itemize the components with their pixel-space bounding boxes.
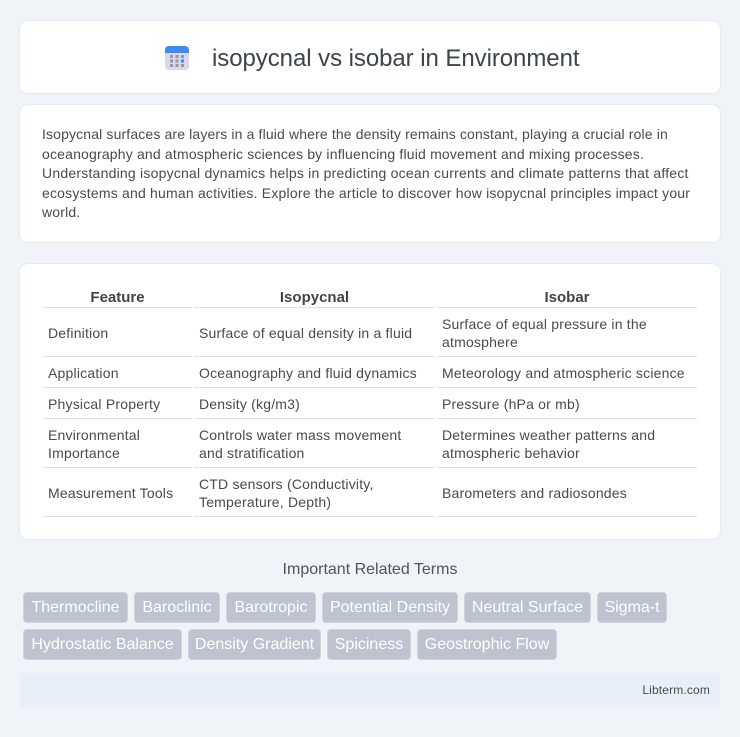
row: Physical Property [48,396,580,412]
row: Environmental Importance: and stratification [199,445,305,461]
row: Measurement Tools: Temperature, Depth) [199,494,331,510]
row: Definition [48,316,647,350]
row: Definition: Surface of equal pressure in the [442,316,647,332]
intro paragraph: Understanding isopycnal dynamics helps in predicting ocean currents and climate patterns that affect [42,165,689,181]
row: Environmental Importance [48,427,655,461]
related term tags: Barotropic [235,599,307,616]
row: Environmental Importance: Controls water mass movement [199,427,401,443]
panel: intro text [20,105,720,242]
row: Physical Property: Physical Property [48,396,160,412]
footer bar [20,673,720,707]
intro paragraph: oceanography and atmospheric sciences by influencing fluid movement and mixing processes. [42,146,644,162]
row: Application: Application [48,365,119,381]
related term tags: Baroclinic [142,599,212,616]
related term tags: Density Gradient [195,636,314,653]
icon: calendar [165,46,189,70]
row: Definition: Definition [48,325,108,341]
row: Application: Oceanography and fluid dynamics [199,365,417,381]
table header: Isobar [544,289,590,306]
table header [90,289,590,306]
row: Application [48,365,685,381]
title: isopycnal vs isobar in Environment [212,45,579,72]
intro paragraph: ecosystems and human activities. Explore the article to discover how isopycnal principles impact your [42,185,690,201]
row: Application: Meteorology and atmospheric science [442,365,685,381]
related term tags: Potential Density [330,599,450,616]
related term tags: Thermocline [31,599,120,616]
row: Environmental Importance: atmospheric behavior [442,445,580,461]
row: Measurement Tools: Measurement Tools [48,485,173,501]
header card [20,21,720,93]
related term tags [23,592,667,660]
row: Measurement Tools [48,476,627,510]
row: Environmental Importance: Importance [48,445,120,461]
related term tags: Sigma-t [604,599,660,616]
intro paragraph: Isopycnal surfaces are layers in a fluid where the density remains constant, playing a crucial role in [42,126,668,142]
related term tags: Hydrostatic Balance [31,636,174,653]
row: Definition: atmosphere [442,334,518,350]
related term tags: Neutral Surface [472,599,583,616]
row: Environmental Importance: Environmental [48,427,140,443]
table header: Feature [90,289,145,306]
related term tags: Geostrophic Flow [425,636,549,653]
panel: comparison table [20,264,720,539]
row: Definition: Surface of equal density in a fluid [199,325,412,341]
intro paragraph [42,126,690,220]
table header: Isopycnal [280,289,349,306]
intro paragraph: world. [42,204,80,220]
row: Physical Property: Pressure (hPa or mb) [442,396,580,412]
row: Measurement Tools: CTD sensors (Conductivity, [199,476,374,492]
row: Physical Property: Density (kg/m3) [199,396,300,412]
row: Environmental Importance: Determines weather patterns and [442,427,655,443]
related term tags: Spiciness [335,636,403,653]
heading: Important Related Terms: Important Related Terms [283,561,457,578]
row: Measurement Tools: Barometers and radiosondes [442,485,627,501]
footer credit: Libterm.com [642,683,710,697]
